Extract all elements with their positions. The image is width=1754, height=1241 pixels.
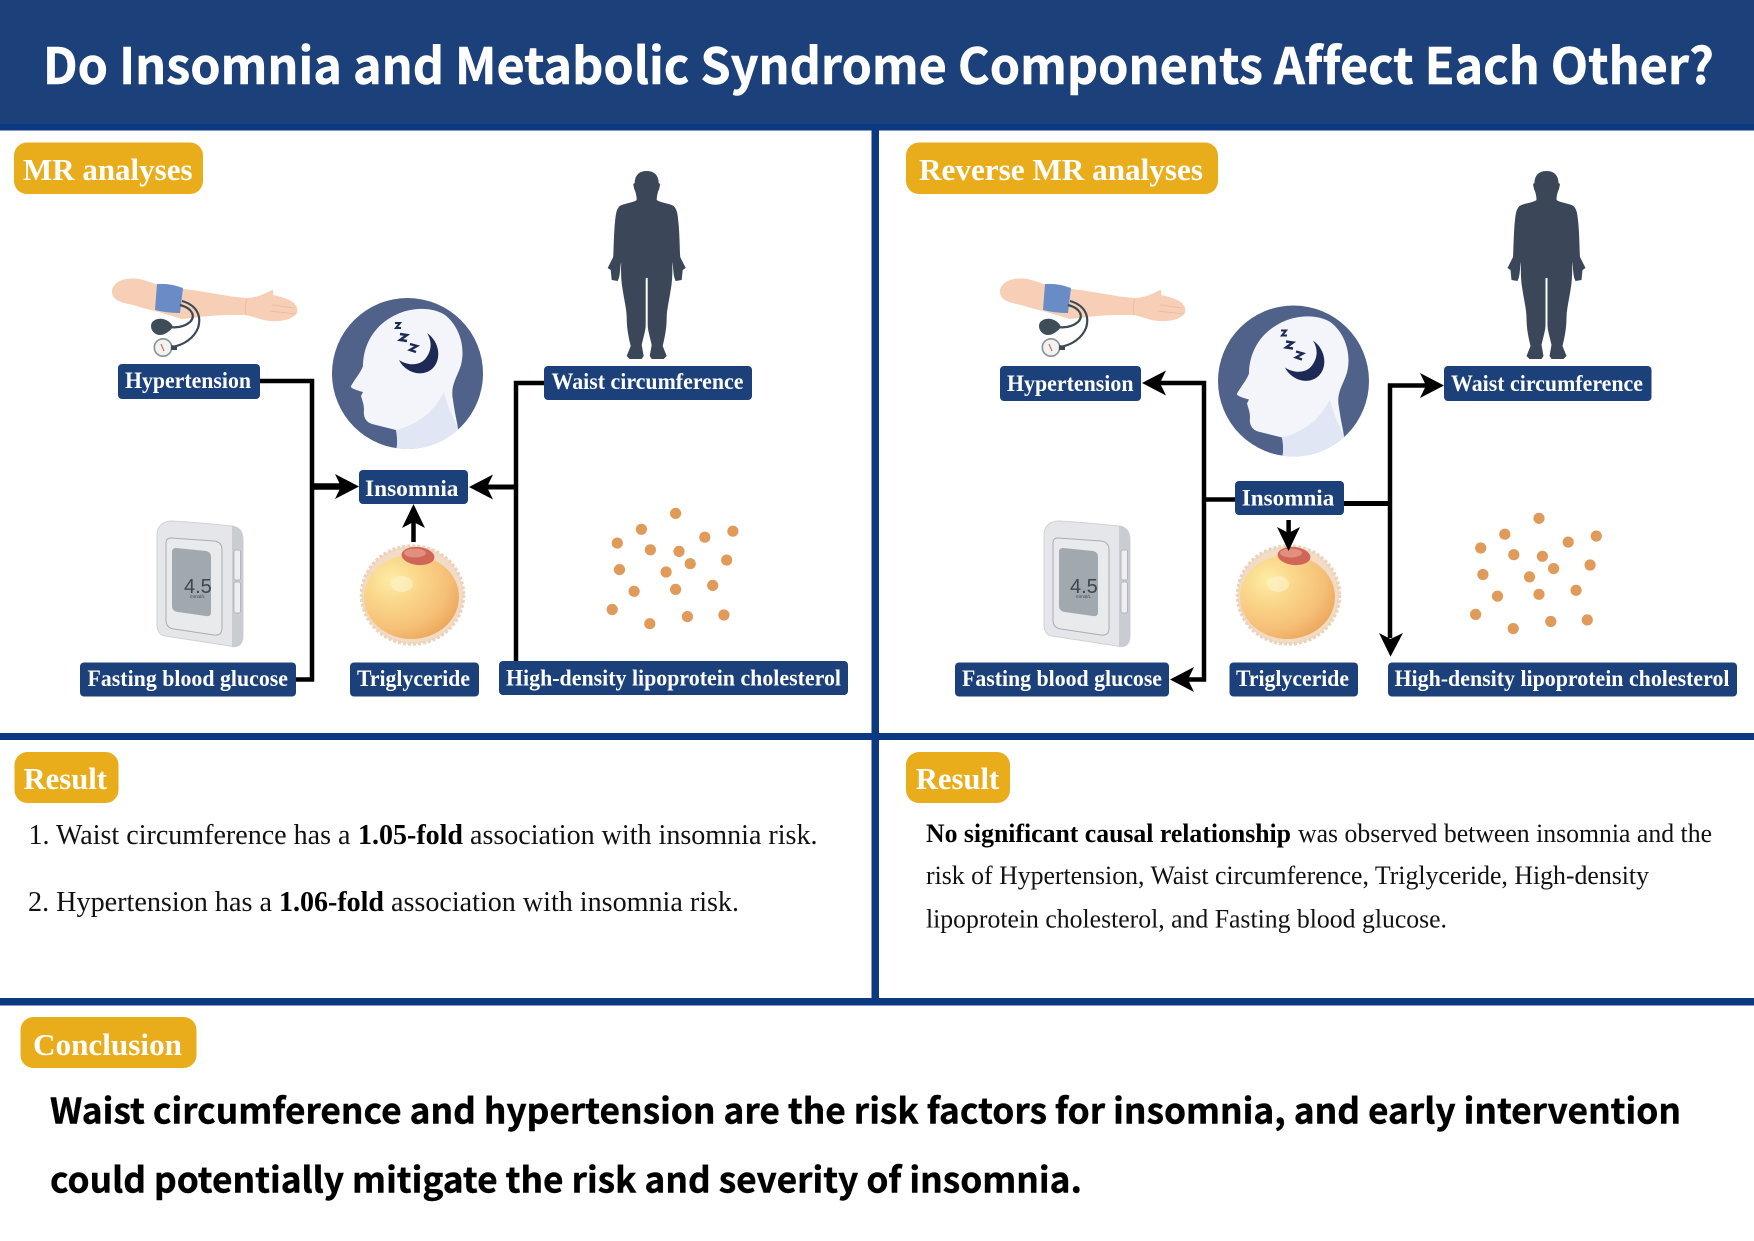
icon: human silhouette — [1508, 171, 1586, 359]
arrow: right risk factors to insomnia — [469, 383, 544, 661]
conclusion text: Waist circumference and hypertension are the risk factors for insomnia, and early intervention — [50, 1084, 1681, 1134]
badge: Result — [906, 752, 1010, 803]
label: Insomnia: Insomnia — [1242, 486, 1335, 510]
icon: human silhouette — [608, 171, 686, 359]
label: Triglyceride — [350, 662, 479, 696]
badge: Result: Result — [24, 761, 108, 796]
label: Triglyceride: Triglyceride — [1236, 666, 1349, 691]
result line 1: association with insomnia risk. — [470, 820, 818, 851]
label: Triglyceride: Triglyceride — [357, 666, 470, 691]
result line 1: 1. Waist circumference has a — [28, 820, 351, 851]
label: Insomnia — [1235, 481, 1344, 515]
result line 1: 1.05-fold — [358, 820, 463, 851]
result line 2: 1.06-fold — [279, 887, 384, 918]
icon: sleeping head — [332, 298, 483, 452]
result paragraph: No significant causal relationship — [926, 819, 1291, 848]
icon: glucose meter — [157, 521, 243, 647]
result paragraph: was observed between insomnia and the — [1298, 819, 1712, 848]
result paragraph: risk of Hypertension, Waist circumference, Triglyceride, High-density — [926, 861, 1649, 890]
icon: glucose meter — [1044, 521, 1130, 647]
icon: HDL particles — [1470, 513, 1602, 634]
result line 1 — [28, 820, 818, 851]
conclusion text: could potentially mitigate the risk and severity of insomnia. — [50, 1152, 1082, 1204]
icon: glucose meter: 4.5 — [184, 576, 212, 598]
arrow: left risk factors to insomnia — [260, 381, 359, 680]
badge: Conclusion: Conclusion — [33, 1027, 182, 1062]
icon: blood pressure arm — [112, 278, 297, 356]
label: Hypertension — [118, 364, 260, 399]
arrow: insomnia to hypertension and fasting glucose — [1142, 370, 1235, 692]
arrow: triglyceride to insomnia — [402, 504, 425, 542]
panel: Reverse MR analyses — [906, 142, 1737, 696]
icon: blood pressure arm — [1000, 278, 1185, 356]
badge: Result — [14, 752, 118, 803]
label: Fasting blood glucose: Fasting blood glucose — [962, 666, 1162, 691]
icon: sleeping head — [1218, 306, 1369, 460]
icon: fat cell — [1238, 545, 1340, 644]
result paragraph: lipoprotein cholesterol, and Fasting blood glucose. — [926, 904, 1447, 934]
icon: glucose meter: mmol/L — [190, 594, 206, 599]
panel: Conclusion — [20, 1017, 1681, 1204]
label: Hypertension: Hypertension — [1007, 371, 1134, 396]
label: Waist circumference: Waist circumference — [552, 369, 744, 394]
panel: MR analyses — [14, 142, 848, 696]
label: Triglyceride — [1230, 662, 1358, 696]
label: High-density lipoprotein cholesterol: High-density lipoprotein cholesterol — [1394, 666, 1730, 691]
label: Insomnia: Insomnia — [365, 476, 459, 501]
icon: glucose meter: 4.5 — [1070, 576, 1098, 598]
badge: MR analyses: MR analyses — [23, 152, 192, 187]
result paragraph — [926, 819, 1712, 934]
panel: MR result — [14, 752, 818, 918]
label: High-density lipoprotein cholesterol: High-density lipoprotein cholesterol — [506, 666, 841, 690]
label: Waist circumference — [1444, 366, 1652, 401]
icon: HDL particles — [607, 508, 739, 629]
icon: fat cell — [362, 545, 464, 644]
arrow: insomnia to waist and HDL — [1344, 373, 1444, 657]
label: Fasting blood glucose: Fasting blood glucose — [88, 666, 288, 691]
badge: Reverse MR analyses: Reverse MR analyses — [919, 152, 1203, 187]
icon: glucose meter: mmol/L — [1076, 594, 1092, 599]
result line 2 — [28, 887, 739, 918]
badge: Result: Result — [916, 761, 1000, 796]
result line 2: 2. Hypertension has a — [28, 887, 273, 918]
badge: Conclusion — [20, 1017, 196, 1068]
header banner — [0, 0, 1754, 130]
result line 2: association with insomnia risk. — [391, 887, 739, 918]
badge: Reverse MR analyses — [906, 142, 1218, 194]
label: Insomnia — [359, 470, 468, 504]
title: Do Insomnia and Metabolic Syndrome Components Affect Each Other? — [43, 27, 1714, 99]
panel: Reverse MR result — [906, 752, 1712, 934]
arrow: insomnia to triglyceride — [1277, 520, 1300, 551]
badge: MR analyses — [14, 142, 203, 194]
label: Hypertension: Hypertension — [125, 368, 251, 393]
label: Waist circumference: Waist circumference — [1451, 371, 1643, 396]
conclusion text — [50, 1084, 1681, 1204]
label: Hypertension — [1000, 366, 1141, 401]
